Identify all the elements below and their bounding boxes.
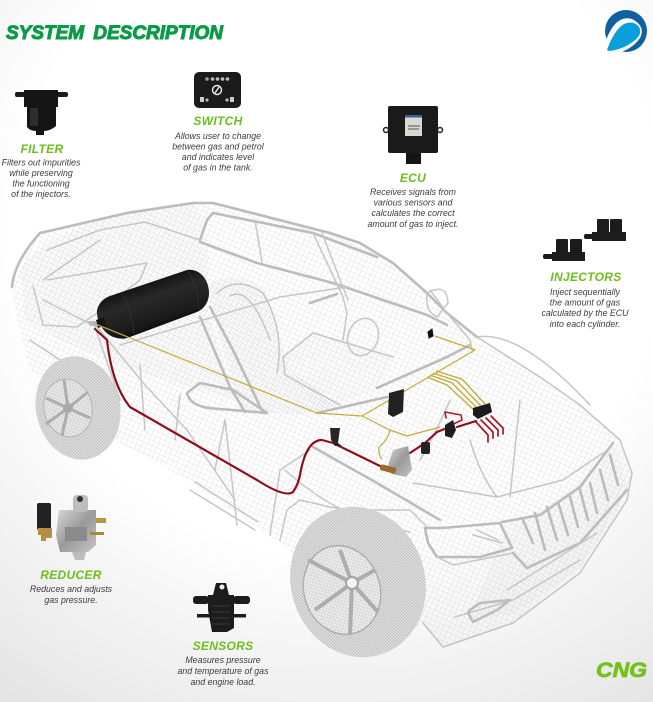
car wireframe: [12, 203, 632, 647]
panel: sensors: [178, 583, 269, 687]
text: filter description: the functioning: [12, 178, 70, 188]
icon: logo: [602, 10, 647, 55]
heading: switch: SWITCH: [193, 114, 243, 128]
heading: ecu: ECU: [400, 171, 426, 185]
icon: injectors: [543, 219, 626, 261]
heading: filter: FILTER: [21, 142, 63, 156]
text: switch description: Allows user to change: [174, 131, 261, 141]
icon: ecu: [384, 106, 442, 164]
structure strokes: [30, 213, 627, 647]
component: reducer: [379, 446, 412, 477]
heading: sensors: SENSORS: [193, 639, 253, 653]
panel: reducer: [30, 495, 113, 605]
heading: reducer: REDUCER: [40, 568, 102, 582]
text: switch description: between gas and petrol: [172, 142, 265, 152]
grille mesh: [470, 445, 628, 620]
yellow signal wires: [93, 323, 485, 459]
component: map sensor: [445, 420, 456, 438]
tank: [87, 270, 209, 339]
text: reducer description: gas pressure.: [44, 595, 98, 605]
text: sensors description: and engine load.: [190, 677, 256, 687]
outline strokes: [12, 203, 477, 337]
icon: filter: [15, 90, 68, 135]
car body: [12, 203, 632, 647]
component: switch unit: [428, 329, 433, 338]
dashboard mesh: [283, 333, 393, 413]
text: ecu description: calculates the correct: [371, 208, 455, 218]
text: switch description: and indicates level: [182, 152, 255, 162]
text: injectors description: Inject sequentially: [550, 287, 621, 297]
text: filter description: while preserving: [9, 168, 73, 178]
text: injectors description: into each cylinder.: [550, 319, 620, 329]
text: filter description: of the injectors.: [11, 189, 71, 199]
engine components: [330, 329, 492, 477]
text: ecu description: various sensors and: [374, 198, 453, 208]
icon: reducer: [37, 495, 106, 560]
panel: switch: [172, 72, 265, 172]
text: sensors description: Measures pressure: [185, 655, 261, 665]
hood and bumper outline: [423, 337, 632, 647]
component: engine ecu: [388, 389, 404, 417]
red gas pipe: [95, 329, 503, 494]
icon: sensors: [193, 583, 250, 632]
front wheel: [271, 489, 445, 675]
component: rail sensor: [421, 442, 430, 454]
text: switch description: of gas in the tank.: [183, 162, 253, 172]
panel: filter: [2, 90, 81, 199]
text: sensors description: and temperature of gas: [178, 666, 269, 676]
panel: ecu: [368, 106, 458, 229]
rear wheel: [26, 348, 130, 468]
label: CNG: CNG: [596, 659, 647, 682]
text: ecu description: amount of gas to inject.: [368, 219, 458, 229]
rear interior mesh: [20, 203, 235, 400]
text: injectors description: the amount of gas: [550, 298, 621, 308]
component: sensor mount: [330, 428, 342, 446]
text: injectors description: calculated by the ECU: [541, 308, 629, 318]
title: SYSTEM DESCRIPTION: [6, 23, 224, 44]
text: ecu description: Receives signals from: [370, 187, 456, 197]
heading: injectors: INJECTORS: [550, 270, 622, 284]
text: reducer description: Reduces and adjusts: [30, 584, 113, 594]
icon: switch: [194, 72, 241, 108]
text: filter description: Filters out impurities: [2, 158, 81, 168]
component: injector rail: [473, 403, 492, 419]
panel: injectors: [541, 219, 629, 329]
seats mesh: [205, 278, 340, 415]
